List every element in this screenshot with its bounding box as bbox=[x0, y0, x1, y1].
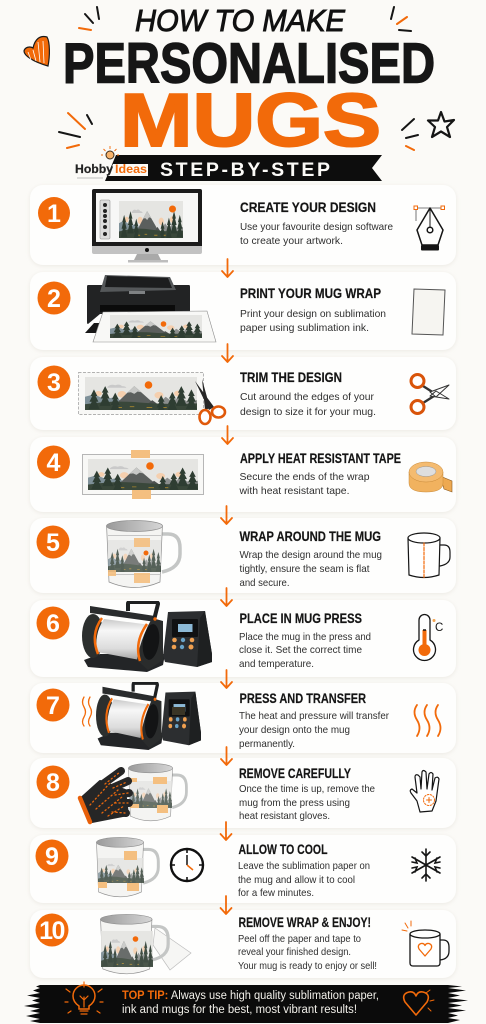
illustration: taped design bbox=[82, 450, 204, 499]
step number 6 bbox=[36, 606, 70, 640]
step text 5 bbox=[240, 529, 382, 589]
step number 3 bbox=[38, 366, 70, 398]
step text 6: and temperature. bbox=[239, 659, 314, 670]
icon: star doodle bbox=[428, 112, 454, 137]
step text 4: Secure the ends of the wrap bbox=[240, 472, 370, 483]
icon: heat waves bbox=[414, 705, 440, 736]
panel: step 5 bbox=[30, 518, 456, 593]
step text 1 bbox=[240, 200, 393, 247]
arrow 1 to 2 bbox=[222, 259, 233, 277]
step number 1 bbox=[38, 197, 70, 229]
icon: heart bbox=[404, 990, 434, 1015]
step text 8 bbox=[239, 766, 375, 822]
step text 9 bbox=[238, 842, 370, 899]
arrow 5 to 6 bbox=[221, 588, 232, 606]
step text 10: Your mug is ready to enjoy or sell! bbox=[238, 961, 377, 972]
arrow 3 to 4 bbox=[222, 426, 233, 444]
doodle burst strokes bbox=[59, 7, 418, 150]
step text 9: for a few minutes. bbox=[238, 888, 314, 899]
panel: step 2 bbox=[30, 272, 456, 350]
step number 4 bbox=[37, 446, 70, 478]
panel: step 10 bbox=[30, 910, 456, 978]
step text 9: ALLOW TO COOL bbox=[238, 842, 328, 858]
step text 10: REMOVE WRAP & ENJOY! bbox=[238, 915, 371, 931]
logo: Hobby Ideas bbox=[75, 146, 148, 178]
step text 4: APPLY HEAT RESISTANT TAPE bbox=[240, 451, 401, 467]
step number 7: 7 bbox=[46, 692, 60, 720]
step text 10: reveal your finished design. bbox=[238, 947, 351, 958]
step text 3: TRIM THE DESIGN bbox=[240, 370, 342, 386]
step text 3: design to size it for your mug. bbox=[240, 407, 376, 418]
illustration: finished mug with peeled paper bbox=[100, 914, 191, 974]
heading ribbon: step-by-step: STEP-BY-STEP bbox=[160, 159, 330, 181]
icon: small heat waves bbox=[82, 697, 92, 726]
illustration: mug press bbox=[82, 602, 212, 672]
step number 10: 10 bbox=[39, 917, 64, 945]
step text 4 bbox=[238, 451, 401, 497]
step text 8: REMOVE CAREFULLY bbox=[239, 766, 351, 782]
step text 10 bbox=[238, 915, 377, 972]
arrow 6 to 7 bbox=[221, 670, 232, 688]
step number 10 bbox=[36, 914, 68, 946]
icon: mug with seam bbox=[408, 533, 450, 578]
panel: step 6 bbox=[30, 600, 456, 677]
step text 10: Peel off the paper and tape to bbox=[238, 934, 361, 945]
tip text: TOP TIP: Always use high quality sublimation paper, bbox=[122, 990, 379, 1002]
step text 1: CREATE YOUR DESIGN bbox=[240, 200, 376, 216]
step number 5 bbox=[36, 526, 70, 558]
step number 7 bbox=[36, 688, 70, 722]
arrow 7 to 8 bbox=[221, 747, 232, 765]
step text 9: the mug and allow it to cool bbox=[238, 875, 355, 886]
step text 7: permanently. bbox=[239, 739, 295, 750]
icon: mug with heart bbox=[402, 921, 449, 966]
step number 8 bbox=[36, 766, 70, 798]
arrow 8 to 9 bbox=[220, 822, 232, 840]
step number 2 bbox=[38, 282, 70, 314]
tip text line 2: ink and mugs for the best, most vibrant results! bbox=[122, 1004, 357, 1016]
illustration: printer with paper bbox=[85, 275, 216, 342]
step number 4: 4 bbox=[47, 449, 61, 477]
arrow 4 to 5 bbox=[221, 506, 232, 524]
icon: heart doodle bbox=[24, 36, 49, 66]
step text 6: Place the mug in the press and bbox=[239, 632, 371, 643]
icon: heat glove bbox=[410, 770, 439, 812]
panel: step 1 bbox=[30, 185, 456, 265]
panel: step 7 bbox=[30, 683, 456, 753]
illustration: trimming the design bbox=[78, 372, 225, 424]
step text 6 bbox=[239, 611, 371, 670]
panel: top tip banner bbox=[24, 982, 468, 1023]
step text 8: mug from the press using bbox=[239, 798, 350, 809]
arrow 2 to 3 bbox=[222, 344, 233, 362]
panel: step 9 bbox=[30, 835, 456, 903]
icon: thermometer: C bbox=[435, 622, 443, 634]
step text 5: tightly, ensure the seam is flat bbox=[240, 564, 370, 575]
step text 4: with heat resistant tape. bbox=[238, 486, 350, 497]
illustration: mug press in use bbox=[96, 683, 201, 750]
icon: blank paper bbox=[412, 289, 445, 335]
step text 6: PLACE IN MUG PRESS bbox=[240, 611, 362, 627]
icon: light bulb bbox=[65, 982, 103, 1014]
step text 1: Use your favourite design software bbox=[240, 222, 393, 233]
step text 8: Once the time is up, remove the bbox=[239, 784, 375, 795]
step number 8: 8 bbox=[46, 769, 60, 797]
step text 9: Leave the sublimation paper on bbox=[238, 861, 370, 872]
step text 1: to create your artwork. bbox=[240, 236, 343, 247]
step number 9: 9 bbox=[45, 843, 59, 871]
panel: step 4 bbox=[30, 437, 456, 512]
heading ribbon: step-by-step bbox=[105, 155, 382, 181]
step text 2: Print your design on sublimation bbox=[240, 309, 386, 320]
step number 6: 6 bbox=[46, 610, 60, 638]
step text 7: your design onto the mug bbox=[239, 725, 350, 736]
step text 6: close it. Set the correct time bbox=[239, 645, 362, 656]
step text 5: and secure. bbox=[240, 578, 290, 589]
step number 1: 1 bbox=[47, 200, 61, 228]
step text 2 bbox=[240, 286, 386, 334]
title: how to make: HOW TO MAKE bbox=[135, 3, 345, 38]
step text 7 bbox=[239, 691, 390, 750]
illustration: gloved hand holding mug bbox=[80, 763, 186, 822]
step number 9 bbox=[36, 840, 68, 872]
icon: clock bbox=[171, 849, 203, 881]
logo: Hobby Ideas: Hobby bbox=[75, 162, 113, 176]
step number 3: 3 bbox=[47, 369, 61, 397]
step text 2: PRINT YOUR MUG WRAP bbox=[240, 286, 381, 302]
icon: pen tool bbox=[414, 206, 444, 250]
step text 5: WRAP AROUND THE MUG bbox=[240, 529, 381, 545]
step text 7: PRESS AND TRANSFER bbox=[240, 691, 366, 707]
title: mugs: MUGS bbox=[120, 78, 381, 162]
step number 5: 5 bbox=[46, 529, 60, 557]
step text 8: heat resistant gloves. bbox=[239, 811, 330, 822]
illustration: computer monitor with landscape bbox=[92, 189, 202, 262]
icon: thermometer bbox=[414, 615, 443, 661]
panel: step 3 bbox=[30, 357, 456, 430]
icon: snowflake bbox=[412, 849, 440, 881]
step number 2: 2 bbox=[47, 285, 61, 313]
icon: scissors bbox=[411, 374, 449, 414]
icon: tape roll bbox=[409, 462, 452, 492]
step text 3: Cut around the edges of your bbox=[240, 392, 375, 403]
step text 7: The heat and pressure will transfer bbox=[239, 711, 390, 722]
panel: step 8 bbox=[30, 758, 456, 828]
step text 2: paper using sublimation ink. bbox=[240, 323, 369, 334]
arrow 9 to 10 bbox=[220, 896, 232, 914]
step text 3 bbox=[240, 370, 376, 418]
logo: Hobby Ideas: Ideas bbox=[115, 162, 147, 176]
step text 5: Wrap the design around the mug bbox=[240, 550, 382, 561]
illustration: mug cooling bbox=[96, 837, 158, 897]
illustration: wrapped mug bbox=[106, 520, 180, 588]
